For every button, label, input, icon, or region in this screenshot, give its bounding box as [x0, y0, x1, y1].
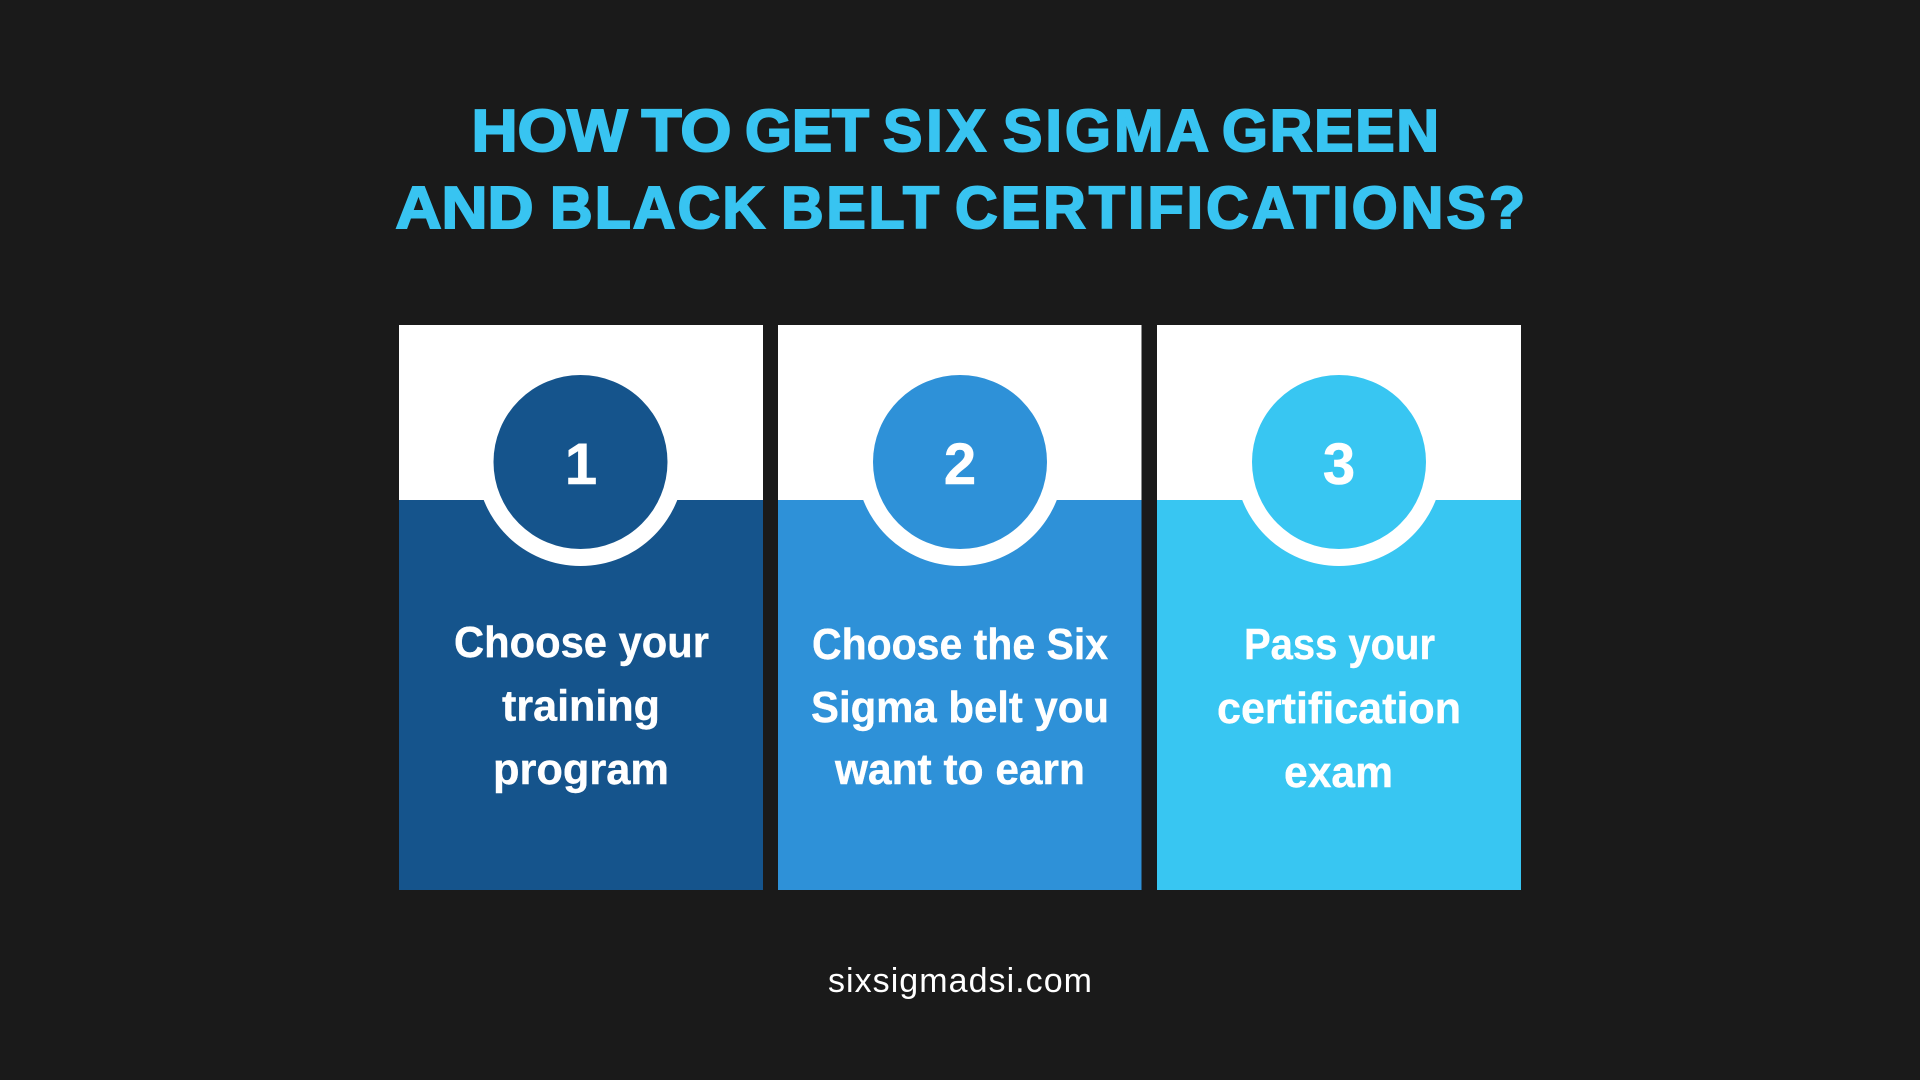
text: pass your certification exam: certification — [1217, 684, 1461, 733]
icon: number circle 2: 2 — [944, 432, 976, 497]
icon: number circle 2 — [873, 375, 1047, 549]
text: choose the six sigma belt you want to earn: Sigma belt you — [811, 683, 1109, 732]
panel: step 2 — [778, 325, 1142, 890]
title: TO — [642, 98, 732, 164]
title: BELT — [781, 175, 939, 241]
text: choose your training program — [454, 618, 709, 794]
text: pass your certification exam: Pass your — [1244, 620, 1435, 669]
text: pass your certification exam: exam — [1284, 748, 1393, 797]
title: AND — [396, 175, 534, 241]
panel: step 3 — [1157, 325, 1521, 890]
icon: number circle 3 — [1252, 375, 1426, 549]
text: choose your training program: training — [502, 682, 660, 730]
title: GREEN — [1222, 98, 1439, 164]
title — [396, 98, 1525, 241]
icon: number circle 1 — [494, 375, 668, 549]
text: pass your certification exam — [1217, 620, 1461, 797]
title: GET — [745, 98, 869, 164]
title: CERTIFICATIONS? — [955, 175, 1525, 241]
title: SIGMA — [1003, 98, 1209, 164]
text: choose the six sigma belt you want to earn: want to earn — [834, 745, 1085, 794]
title: SIX — [883, 98, 986, 164]
text: choose the six sigma belt you want to earn — [811, 620, 1109, 794]
title: HOW — [472, 98, 628, 164]
icon: number circle 1: 1 — [565, 432, 597, 497]
text: choose your training program: Choose your — [454, 618, 709, 667]
text: choose the six sigma belt you want to earn: Choose the Six — [812, 620, 1108, 669]
icon: number circle 3: 3 — [1323, 432, 1355, 497]
title: BLACK — [550, 175, 765, 241]
panel: step 1 — [399, 325, 763, 890]
text: choose your training program: program — [493, 745, 669, 794]
footer url: sixsigmadsi.com — [828, 962, 1092, 1000]
